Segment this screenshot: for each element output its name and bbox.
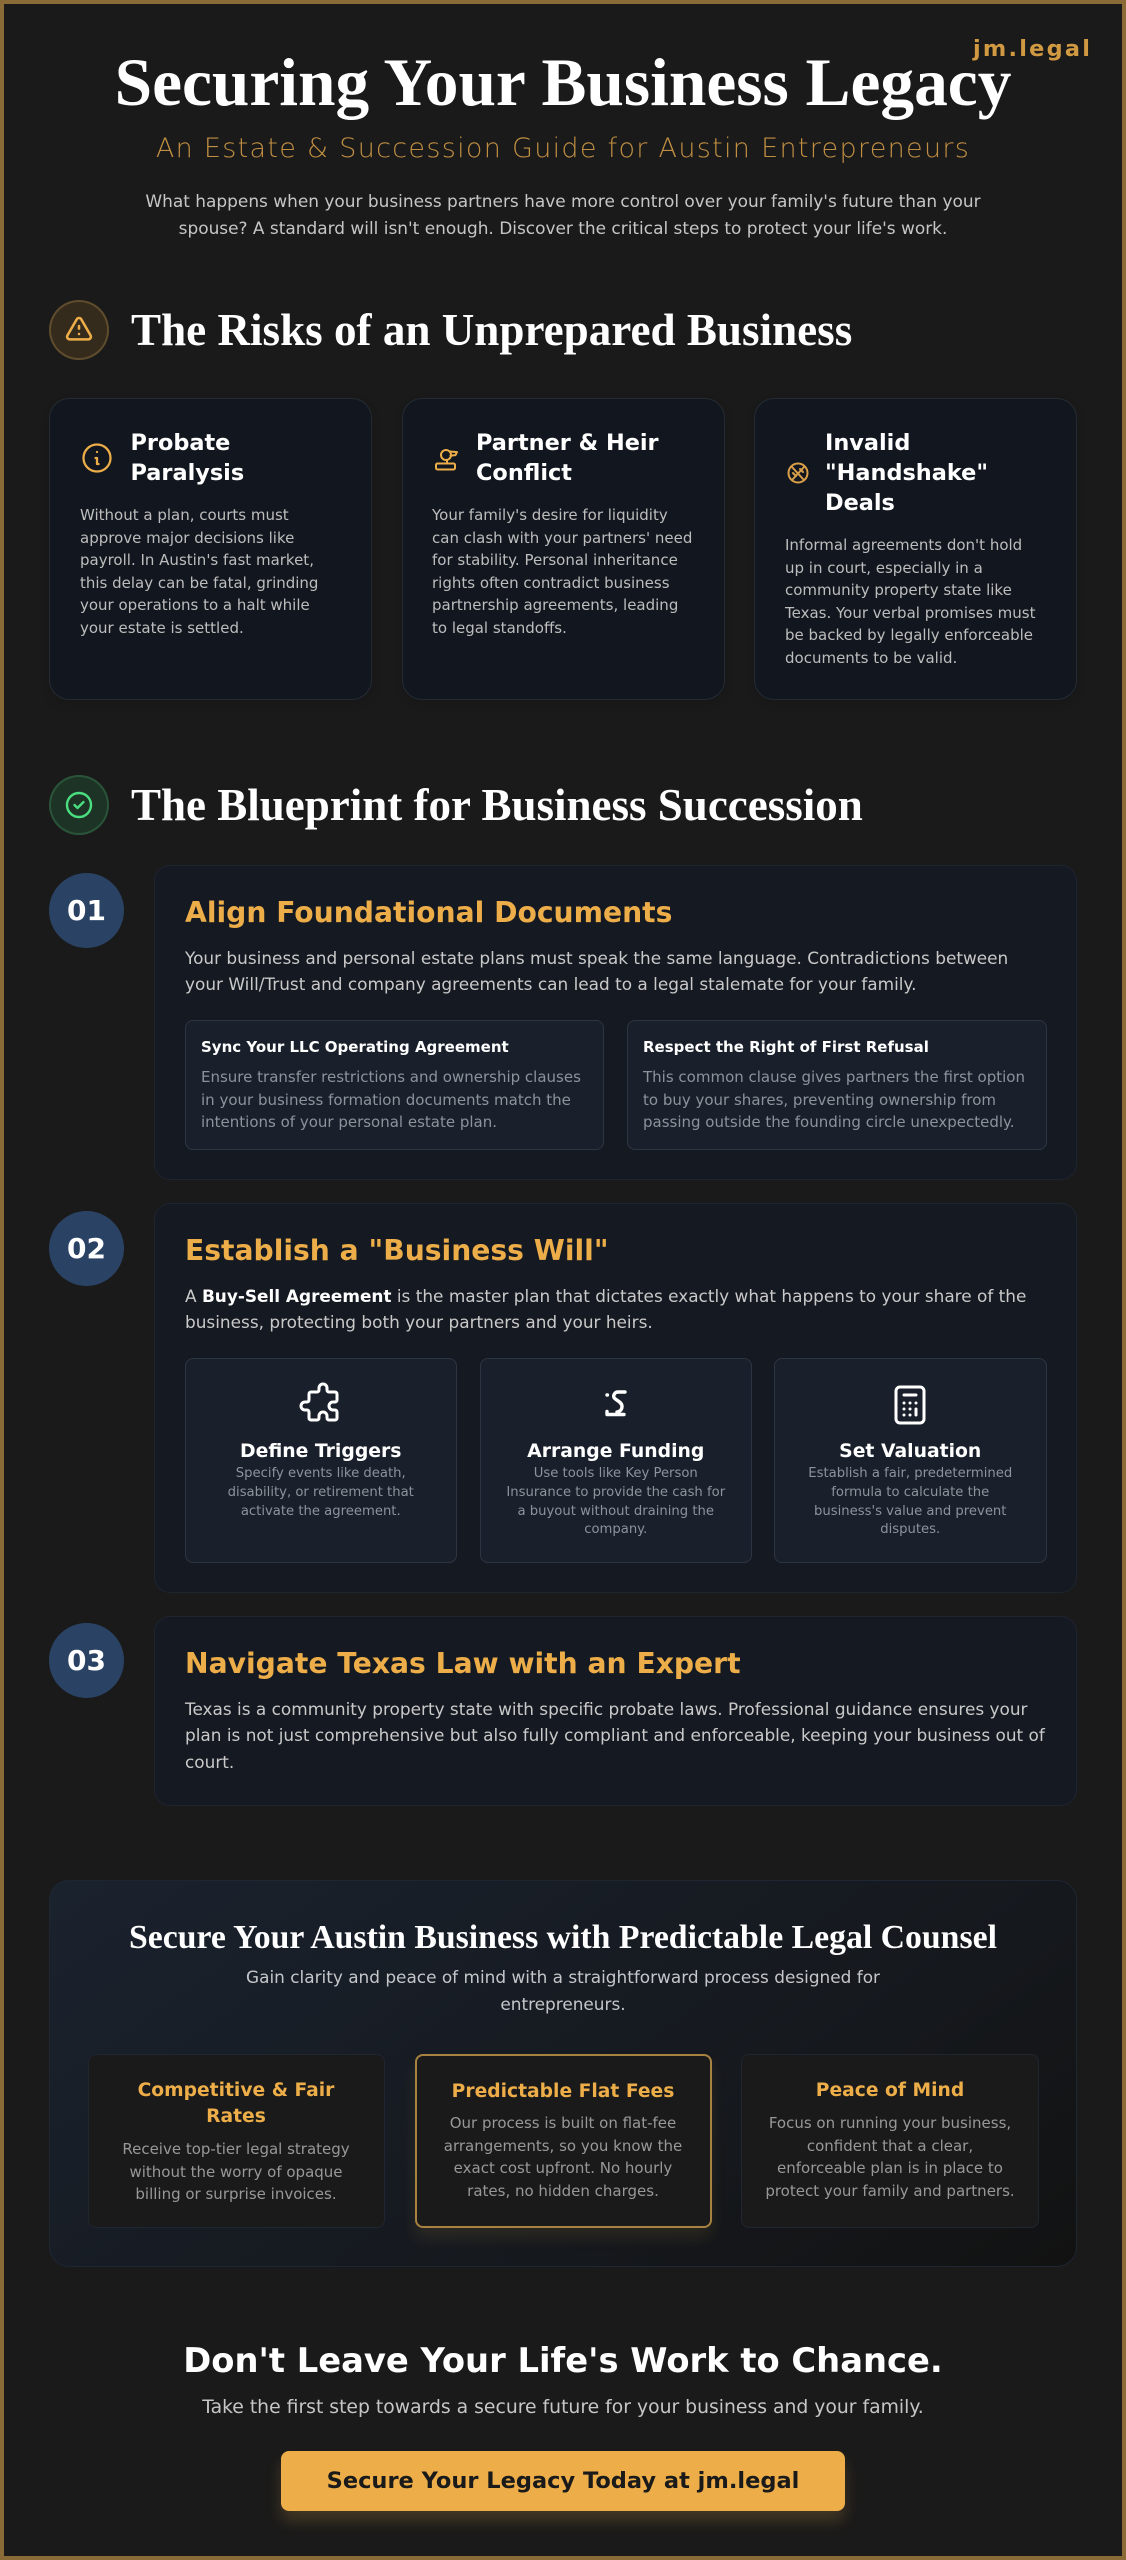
card body: partnership agreements, leading xyxy=(432,596,678,614)
card body: be backed by legally enforceable xyxy=(785,626,1033,644)
sub-card body: activate the agreement. xyxy=(241,1504,401,1519)
benefit body: confident that a clear, xyxy=(807,2136,973,2154)
benefit heading xyxy=(138,2080,334,2127)
icon: calculator xyxy=(894,1386,926,1424)
step number 02 xyxy=(49,1211,124,1286)
sub-card body: Ensure transfer restrictions and ownership clauses xyxy=(201,1068,581,1086)
card body: documents to be valid. xyxy=(785,648,957,666)
panel: partner and heir conflict xyxy=(402,398,724,700)
heading: blueprint: The Blueprint for Business Succession xyxy=(131,780,863,830)
benefit body: exact cost upfront. No hourly xyxy=(454,2159,672,2177)
sub-card: right of first refusal xyxy=(627,1020,1046,1150)
panel: probate paralysis xyxy=(49,398,372,700)
sub-card heading: Arrange Funding xyxy=(527,1440,704,1462)
card heading xyxy=(825,430,988,516)
benefit body xyxy=(122,2140,350,2203)
icon: dollar xyxy=(605,1390,627,1416)
step paragraph: business, protecting both your partners and your heirs. xyxy=(185,1312,653,1332)
card heading xyxy=(476,430,659,486)
sub-card body: Establish a fair, predetermined xyxy=(808,1466,1012,1481)
benefit body xyxy=(444,2114,682,2200)
sub-card: set valuation xyxy=(774,1358,1046,1563)
step number 01 xyxy=(49,873,124,948)
panel: step 2 xyxy=(154,1203,1076,1593)
panel: step 1 xyxy=(154,865,1076,1180)
benefit body: protect your family and partners. xyxy=(765,2182,1015,2200)
card heading: Probate xyxy=(130,430,230,456)
counsel heading: Secure Your Austin Business with Predictable Legal Counsel xyxy=(129,1919,997,1956)
sub-card body: formula to calculate the xyxy=(831,1485,989,1500)
step number 01: 01 xyxy=(67,894,106,927)
sub-card body: intentions of your personal estate plan. xyxy=(201,1113,497,1131)
card body: Texas. Your verbal promises must xyxy=(785,604,1035,622)
sub-card body: This common clause gives partners the first option xyxy=(643,1068,1025,1086)
card body: your operations to a halt while xyxy=(80,596,310,614)
sub-card body: Use tools like Key Person xyxy=(534,1466,698,1481)
sub-card body: passing outside the founding circle unexpectedly. xyxy=(643,1113,1015,1131)
benefit heading: Rates xyxy=(206,2106,266,2127)
panel: legal counsel xyxy=(49,1880,1077,2267)
benefit: competitive rates xyxy=(88,2054,384,2228)
card body: approve major decisions like xyxy=(80,528,294,546)
sub-card body: in your business formation documents match the xyxy=(201,1090,571,1108)
step paragraph: A Buy-Sell Agreement is the master plan that dictates exactly what happens to your share of the xyxy=(185,1286,1026,1306)
sub-card heading: Set Valuation xyxy=(839,1440,981,1462)
sub-card body: disputes. xyxy=(880,1522,940,1537)
step number 03 xyxy=(49,1623,124,1698)
card heading: "Handshake" xyxy=(825,460,988,486)
card body xyxy=(80,506,318,636)
step paragraph: court. xyxy=(185,1752,234,1772)
benefit heading: Predictable Flat Fees xyxy=(452,2081,674,2102)
card body: can clash with your partners' need xyxy=(432,528,692,546)
card body: for stability. Personal inheritance xyxy=(432,551,678,569)
button xyxy=(281,2451,845,2511)
benefit heading: Peace of Mind xyxy=(816,2080,964,2101)
card body: payroll. In Austin's fast market, xyxy=(80,551,314,569)
sub-card body: company. xyxy=(584,1522,647,1537)
card body: community property state like xyxy=(785,581,1012,599)
step paragraph: your Will/Trust and company agreements can lead to a legal stalemate for your family. xyxy=(185,974,916,994)
sub-card: LLC operating agreement xyxy=(184,1020,604,1150)
sub-card body xyxy=(228,1466,414,1519)
benefit body xyxy=(765,2114,1015,2200)
benefit: peace of mind xyxy=(741,2054,1039,2228)
sub-card body xyxy=(201,1068,581,1131)
title: Securing Your Business Legacy xyxy=(115,45,1011,120)
sub-card body: a buyout without draining the xyxy=(518,1504,714,1519)
counsel subheading: Gain clarity and peace of mind with a straightforward process designed for xyxy=(246,1967,880,1987)
step paragraph: Your business and personal estate plans must speak the same language. Contradictions between xyxy=(185,948,1008,968)
step title: Navigate Texas Law with an Expert xyxy=(185,1646,741,1680)
sub-card body: to buy your shares, preventing ownership from xyxy=(643,1090,996,1108)
sub-card: arrange funding xyxy=(480,1358,752,1563)
card heading: Conflict xyxy=(476,460,572,486)
benefit body: arrangements, so you know the xyxy=(444,2136,682,2154)
card body: Without a plan, courts must xyxy=(80,506,289,524)
icon: info xyxy=(82,443,112,473)
panel: invalid handshake deals xyxy=(754,398,1077,700)
icon: warning triangle badge xyxy=(49,300,109,360)
icon: gavel xyxy=(435,449,458,470)
card body: up in court, especially in a xyxy=(785,558,983,576)
sub-card body: Specify events like death, xyxy=(236,1466,406,1481)
sub-card body: Insurance to provide the cash for xyxy=(506,1485,725,1500)
benefit body: billing or surprise invoices. xyxy=(135,2185,337,2203)
icon: puzzle xyxy=(300,1382,338,1422)
sub-card body xyxy=(506,1466,726,1537)
brand: jm.legal: jm.legal xyxy=(973,36,1092,62)
card body: to legal standoffs. xyxy=(432,618,567,636)
heading: risks: The Risks of an Unprepared Business xyxy=(131,305,852,355)
counsel subheading xyxy=(246,1967,880,2014)
sub-card heading: Respect the Right of First Refusal xyxy=(643,1038,929,1056)
benefit body: enforceable plan is in place to xyxy=(777,2159,1003,2177)
button: Secure Your Legacy Today at jm.legal xyxy=(327,2468,799,2494)
step paragraph xyxy=(185,1286,1026,1332)
benefit body: Focus on running your business, xyxy=(769,2114,1011,2132)
subtitle: An Estate & Succession Guide for Austin Entrepreneurs xyxy=(156,133,970,164)
call to action text: Take the first step towards a secure future for your business and your family. xyxy=(202,2397,924,2418)
panel: step 3 xyxy=(154,1616,1076,1806)
benefit body: rates, no hidden charges. xyxy=(467,2182,659,2200)
card body: your estate is settled. xyxy=(80,618,244,636)
card heading: Partner & Heir xyxy=(476,430,659,456)
sub-card: define triggers xyxy=(184,1358,457,1563)
sub-card body: disability, or retirement that xyxy=(228,1485,414,1500)
sub-card body xyxy=(808,1466,1012,1537)
card heading: Deals xyxy=(825,490,895,516)
benefit body: Our process is built on flat-fee xyxy=(450,2114,676,2132)
card heading: Paralysis xyxy=(130,460,244,486)
step paragraph: plan is not just comprehensive but also fully compliant and enforceable, keeping your business out of xyxy=(185,1725,1045,1745)
sub-card heading: Sync Your LLC Operating Agreement xyxy=(201,1038,509,1056)
card body: this delay can be fatal, grinding xyxy=(80,574,318,592)
card body xyxy=(432,506,692,636)
card body xyxy=(784,536,1036,666)
card body: Your family's desire for liquidity xyxy=(432,506,668,524)
icon: check badge xyxy=(49,775,109,835)
sub-card body xyxy=(642,1068,1025,1131)
intro paragraph xyxy=(145,191,981,238)
step title: Align Foundational Documents xyxy=(185,896,672,929)
benefit body: without the worry of opaque xyxy=(129,2162,343,2180)
benefit: flat fees (highlighted) xyxy=(414,2054,712,2228)
intro paragraph: What happens when your business partners have more control over your family's future than your xyxy=(145,191,981,211)
card heading xyxy=(130,430,244,486)
card heading: Invalid xyxy=(825,430,910,456)
benefit heading: Competitive & Fair xyxy=(138,2080,334,2101)
step number 03: 03 xyxy=(67,1644,106,1677)
benefit body: Receive top-tier legal strategy xyxy=(122,2140,350,2158)
step paragraph xyxy=(185,948,1008,994)
card body: rights often contradict business xyxy=(432,574,670,592)
step paragraph xyxy=(184,1699,1046,1772)
step paragraph: Texas is a community property state with specific probate laws. Professional guidance ensures your xyxy=(185,1699,1028,1719)
icon: handshake xyxy=(788,462,808,484)
intro paragraph: spouse? A standard will isn't enough. Discover the critical steps to protect your life's work. xyxy=(179,218,947,238)
call to action heading: Don't Leave Your Life's Work to Chance. xyxy=(183,2341,943,2380)
sub-card body: business's value and prevent xyxy=(814,1504,1006,1519)
step number 02: 02 xyxy=(67,1232,106,1265)
sub-card heading: Define Triggers xyxy=(240,1440,401,1462)
counsel subheading: entrepreneurs. xyxy=(500,1994,626,2014)
card body: Informal agreements don't hold xyxy=(785,536,1022,554)
step title: Establish a "Business Will" xyxy=(185,1234,609,1266)
